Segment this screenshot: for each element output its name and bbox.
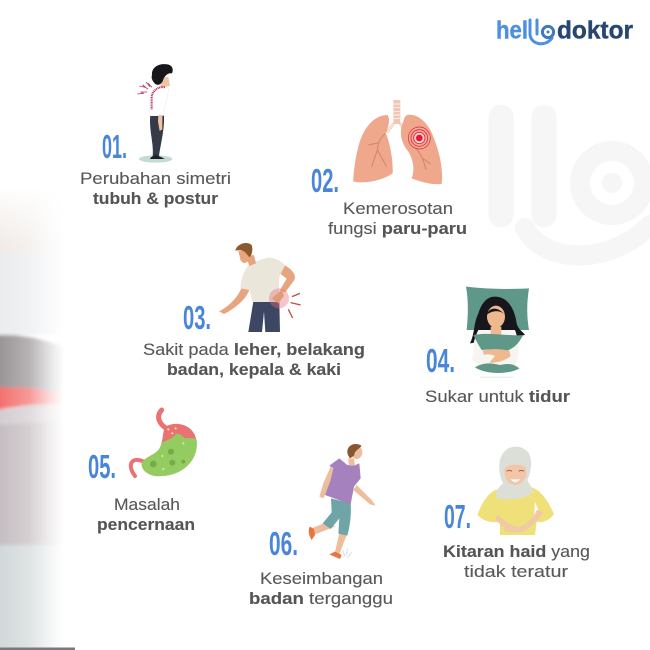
icon: person with curved spine	[137, 64, 173, 163]
item 02: lungs: fungsi paru-paru	[328, 220, 467, 238]
number 03: 03.	[183, 299, 211, 336]
icon: lungs with target	[353, 100, 442, 184]
item 02: lungs	[311, 100, 467, 238]
label 04: Sukar untuk tidur	[425, 388, 571, 406]
logo: hellodoktor: doktor	[557, 16, 633, 44]
item 07: menstruation: tidak teratur	[464, 563, 569, 581]
item 03: pain	[143, 243, 365, 379]
label 02: Kemerosotan	[343, 200, 453, 218]
number 05: 05.	[88, 448, 116, 485]
icon: woman hugging a pillow in bed	[466, 287, 529, 377]
label 01: Perubahan simetri	[80, 170, 231, 188]
item 03: pain: badan, kepala & kaki	[167, 361, 341, 379]
number 02: 02.	[311, 162, 339, 199]
label 03: Sakit pada leher, belakang	[143, 341, 365, 359]
label 05: Masalah	[114, 496, 180, 514]
item 07: menstruation	[443, 447, 590, 581]
item 04: sleep	[425, 287, 571, 406]
logo stethoscope mark	[530, 20, 554, 44]
label 06: Keseimbangan	[260, 570, 383, 588]
watermark stethoscope logo	[501, 117, 650, 255]
background photo fading into white	[0, 185, 84, 650]
number 04: 04.	[426, 342, 455, 379]
number 06: 06.	[269, 525, 298, 562]
logo: hellodoktor: hel	[496, 16, 528, 44]
number 01: 01.	[102, 128, 127, 165]
item 01: posture: tubuh & postur	[93, 190, 219, 208]
item 06: balance	[249, 444, 393, 608]
icon: man holding his hip	[219, 243, 301, 332]
icon: woman in hijab holding her stomach	[477, 447, 554, 535]
item 06: balance: badan terganggu	[249, 590, 393, 608]
item 01: posture	[80, 64, 231, 208]
logo: hellodoktor	[496, 16, 633, 44]
icon: woman stumbling	[309, 444, 376, 559]
number 07: 07.	[444, 498, 471, 535]
icon: stomach	[131, 410, 197, 476]
item 05: digestion: pencernaan	[97, 516, 195, 534]
label 07: Kitaran haid yang	[443, 543, 590, 561]
item 05: digestion	[88, 410, 197, 534]
